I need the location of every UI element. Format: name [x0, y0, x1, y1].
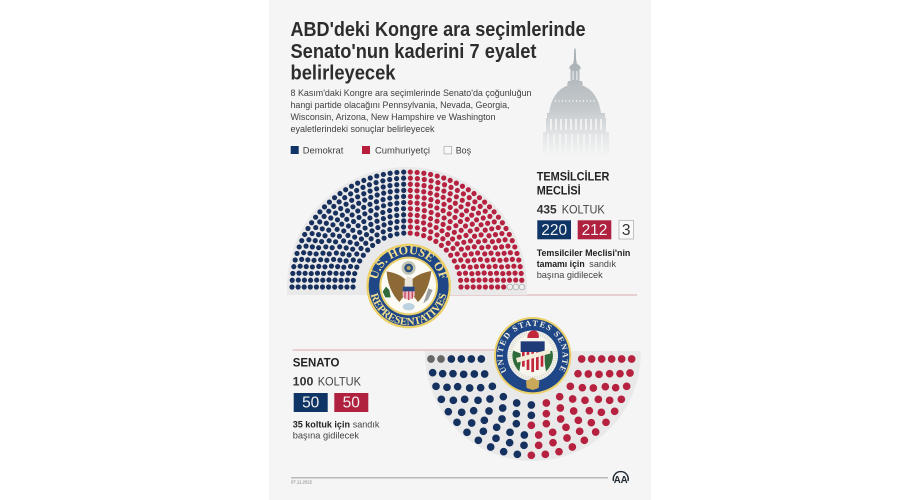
seat count: 100: KOLTUK: [318, 375, 361, 389]
heading: Temsilciler Meclisi: TEMSİLCİLER: [537, 169, 610, 184]
capitol building illustration: [543, 48, 609, 156]
legend: [291, 146, 471, 156]
chamber chart: senate: [425, 351, 641, 461]
heading: Temsilciler Meclisi: [537, 169, 610, 198]
seat count: 435: [537, 203, 605, 217]
divider: house: [450, 294, 637, 296]
note: house: tamamı için: [537, 259, 585, 269]
legend: Boş: [456, 146, 471, 156]
seat boxes: house: 3: [622, 222, 631, 239]
seat count: 435: KOLTUK: [562, 203, 605, 217]
date: 07.11.2022: [291, 480, 312, 484]
section: house info: [537, 169, 634, 280]
legend: Cumhuriyetçi: [375, 146, 430, 156]
note: senate: [293, 419, 380, 440]
seal: United States Senate: [494, 317, 572, 394]
note: house: Temsilciler Meclisi'nin: [537, 248, 631, 258]
seat count: 100: [293, 375, 361, 389]
seat count: 435: 435: [537, 203, 557, 217]
section: senate info: [293, 356, 380, 440]
footer line: [291, 477, 608, 478]
heading: Temsilciler Meclisi: MECLİSİ: [537, 183, 581, 198]
chamber chart: house: [287, 167, 527, 295]
seat boxes: senate: [294, 393, 368, 412]
seat boxes: senate: 50: [343, 394, 360, 412]
title: [290, 19, 586, 84]
seal: U.S. House of Representatives: U.S. HOUSE OF: [370, 246, 448, 278]
seal: U.S. House of Representatives: [366, 244, 451, 328]
background panel: [269, 0, 651, 500]
title: Senato'nun kaderini 7 eyalet: [290, 41, 537, 63]
note: senate: başına gidilecek: [293, 430, 359, 440]
note: house: başına gidilecek: [537, 270, 603, 280]
seat boxes: house: 212: [582, 222, 607, 239]
note: senate: sandık: [353, 419, 380, 429]
note: senate: 35 koltuk için: [293, 419, 350, 429]
title: belirleyecek: [290, 62, 396, 84]
seat boxes: senate: 50: [302, 394, 320, 412]
heading: Senato: SENATO: [293, 356, 339, 370]
intro text: 8 Kasım'daki Kongre ara seçimlerinde Senato'da çoğunluğun: [290, 88, 532, 99]
legend: Demokrat: [303, 146, 344, 156]
seat boxes: house: [537, 220, 634, 239]
intro text: eyaletlerindeki sonuçlar belirleyecek: [290, 124, 435, 135]
seat boxes: house: 220: [541, 222, 568, 239]
title: ABD'deki Kongre ara seçimlerinde: [290, 19, 586, 41]
logo: AA: AA: [614, 475, 628, 486]
intro text: hangi partide olacağını Pennsylvania, Nevada, Georgia,: [290, 100, 510, 111]
seat count: 100: 100: [293, 375, 314, 389]
intro text: Wisconsin, Arizona, New Hampshire ve Washington: [290, 112, 496, 123]
intro text: [290, 88, 532, 135]
note: house: sandık: [589, 259, 616, 269]
seal: U.S. House of Representatives: REPRESENTATIVES: [370, 292, 446, 326]
note: house: [537, 248, 631, 280]
seal: United States Senate: UNITED STATES SENATE: [497, 320, 568, 374]
divider: senate: [293, 350, 495, 351]
